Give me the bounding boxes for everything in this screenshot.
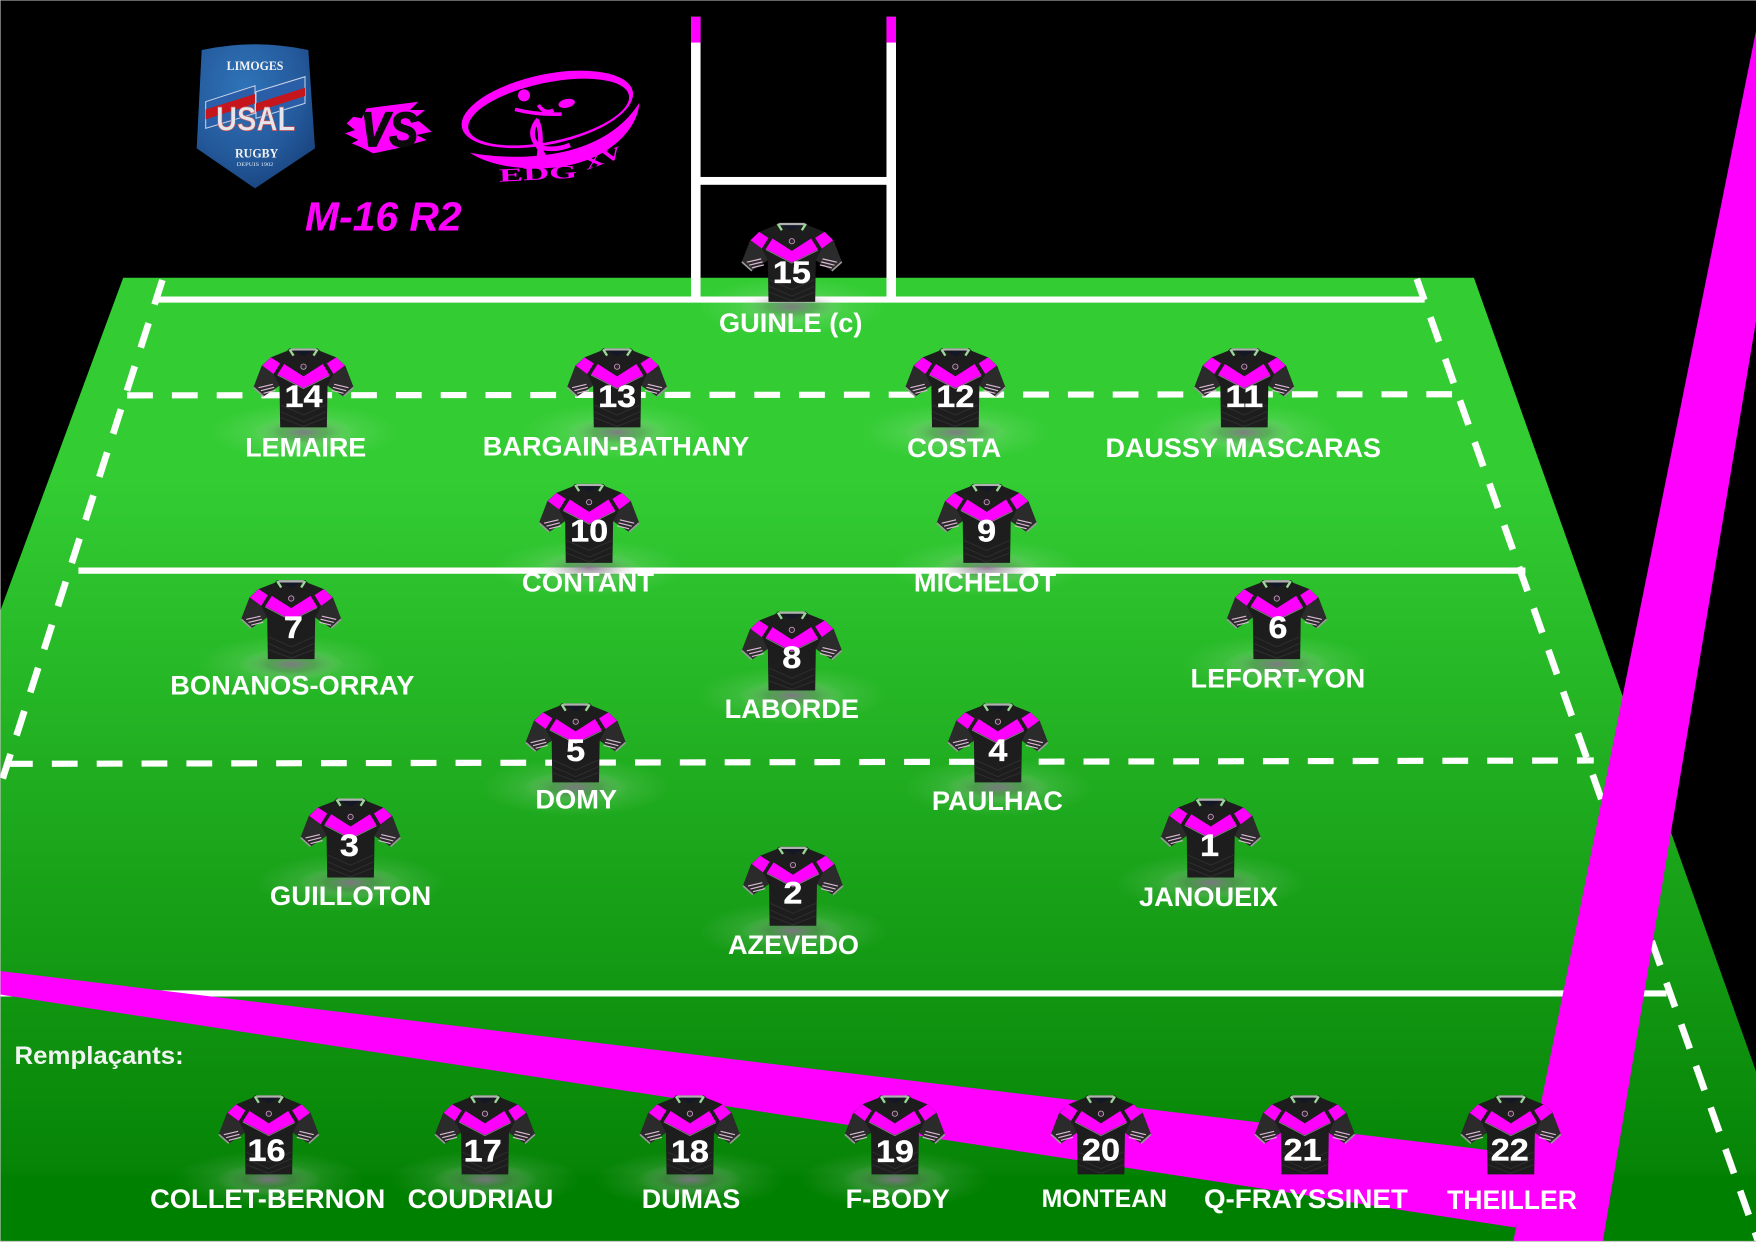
player 12 <box>860 348 1051 463</box>
name: COUDRIAU <box>408 1184 553 1214</box>
name: DAUSSY MASCARAS <box>1105 433 1381 463</box>
number 12: 12 <box>936 379 974 414</box>
name: CONTANT <box>522 567 655 597</box>
name: BARGAIN-BATHANY <box>483 431 749 461</box>
jersey 19 <box>845 1095 945 1174</box>
jersey 13 <box>567 348 667 427</box>
left post pad <box>691 17 701 43</box>
right upright <box>886 17 896 297</box>
substitute 21 <box>1204 1095 1408 1214</box>
jersey 11 <box>1194 348 1294 427</box>
rugby field <box>0 278 1756 1242</box>
jersey 5 <box>526 703 626 782</box>
magenta bar: horizontal <box>0 971 1546 1228</box>
jersey 18 <box>640 1095 740 1174</box>
logo: Limoges USAL Rugby shield <box>197 44 315 188</box>
number 1: 1 <box>1200 828 1219 863</box>
number 18: 18 <box>671 1134 709 1169</box>
player 15 <box>697 223 887 338</box>
try line <box>156 297 1425 302</box>
jersey 15 <box>742 223 842 302</box>
match header <box>197 44 640 240</box>
logo: Limoges USAL Rugby shield: DEPUIS 1902 <box>237 162 274 168</box>
substitute 22 <box>1447 1095 1577 1215</box>
jersey 8 <box>742 612 842 691</box>
left touch line <box>0 280 162 797</box>
name: Q-FRAYSSINET <box>1204 1184 1408 1214</box>
name: F-BODY <box>846 1184 950 1214</box>
player 13 <box>483 348 749 461</box>
right touch line <box>1417 279 1756 1242</box>
name: MONTEAN <box>1042 1186 1167 1213</box>
logo: EDG XV: XV <box>582 143 625 174</box>
number 9: 9 <box>977 514 996 549</box>
number 20: 20 <box>1082 1132 1120 1167</box>
player 10 <box>494 484 684 597</box>
name: COLLET-BERNON <box>150 1184 385 1214</box>
number 17: 17 <box>464 1133 502 1168</box>
name: DOMY <box>535 785 617 815</box>
name: BONANOS-ORRAY <box>170 670 414 700</box>
player 3 <box>255 799 446 912</box>
logo: EDG XV: EDG <box>498 162 578 187</box>
name: PAULHAC <box>932 786 1063 816</box>
grass surface <box>0 278 1756 1242</box>
number 10: 10 <box>570 514 608 549</box>
player 1 <box>1116 799 1306 912</box>
substitute 19 <box>800 1095 990 1214</box>
jersey 12 <box>905 348 1005 427</box>
name: THEILLER <box>1447 1185 1577 1215</box>
number 7: 7 <box>284 610 303 645</box>
jersey 22 <box>1461 1095 1561 1174</box>
substitute 17 <box>390 1095 580 1214</box>
number 22: 22 <box>1491 1132 1529 1167</box>
player 14 <box>208 348 399 462</box>
name: LEFORT-YON <box>1191 664 1365 694</box>
jersey 4 <box>948 703 1048 782</box>
halfway line <box>78 568 1525 573</box>
name: GUINLE (c) <box>719 308 862 338</box>
goal posts <box>691 17 896 297</box>
player 5 <box>480 703 671 816</box>
jersey 10 <box>539 484 639 563</box>
player 4 <box>903 703 1093 816</box>
22 metre line <box>125 394 1452 395</box>
far dashed line <box>9 760 1594 764</box>
near try line <box>0 991 1667 996</box>
crossbar <box>694 177 892 185</box>
jersey 1 <box>1161 799 1261 878</box>
name: LEMAIRE <box>245 432 366 462</box>
logo: Limoges USAL Rugby shield: LIMOGES <box>227 59 283 73</box>
category title: M-16 R2 <box>305 194 462 240</box>
substitute 18 <box>595 1095 785 1214</box>
jersey 20 <box>1051 1095 1151 1174</box>
jersey 9 <box>937 484 1037 563</box>
name: AZEVEDO <box>728 930 859 960</box>
jersey 3 <box>301 799 401 878</box>
name: COSTA <box>907 433 1001 463</box>
jersey 2 <box>743 847 843 926</box>
name: MICHELOT <box>914 567 1057 597</box>
number 3: 3 <box>340 828 359 863</box>
number 14: 14 <box>284 379 323 414</box>
substitute 20 <box>1042 1095 1167 1213</box>
player 8 <box>697 612 887 725</box>
name: DUMAS <box>642 1184 740 1214</box>
number 4: 4 <box>988 733 1008 768</box>
player 7 <box>170 580 414 700</box>
logo: Limoges USAL Rugby shield: RUGBY <box>235 146 278 160</box>
name: LABORDE <box>725 694 859 724</box>
number 15: 15 <box>773 255 811 290</box>
versus badge: VS <box>361 103 418 157</box>
name: GUILLOTON <box>270 881 431 911</box>
jersey 16 <box>219 1095 319 1174</box>
left upright <box>691 17 701 297</box>
number 11: 11 <box>1225 379 1263 414</box>
player 9 <box>892 484 1082 597</box>
number 6: 6 <box>1268 610 1287 645</box>
number 8: 8 <box>782 640 801 675</box>
jersey 6 <box>1227 580 1327 659</box>
jersey 17 <box>435 1095 535 1174</box>
number 5: 5 <box>566 733 585 768</box>
number 16: 16 <box>248 1133 286 1168</box>
magenta bar: diagonal <box>1513 30 1756 1242</box>
right post pad <box>886 17 896 43</box>
player 2 <box>698 847 888 960</box>
jersey 21 <box>1255 1095 1355 1174</box>
name: JANOUEIX <box>1139 882 1278 912</box>
number 21: 21 <box>1284 1132 1322 1167</box>
jersey 14 <box>254 348 354 427</box>
substitutes heading: Remplaçants: <box>15 1043 184 1070</box>
logo: EDG XV <box>455 57 640 187</box>
substitute 16 <box>150 1095 385 1214</box>
number 2: 2 <box>783 875 802 910</box>
player 6 <box>1182 580 1372 694</box>
number 19: 19 <box>876 1134 914 1169</box>
logo: Limoges USAL Rugby shield: USAL <box>216 101 295 139</box>
jersey 7 <box>241 580 341 659</box>
player 11 <box>1105 348 1381 463</box>
number 13: 13 <box>598 379 636 414</box>
